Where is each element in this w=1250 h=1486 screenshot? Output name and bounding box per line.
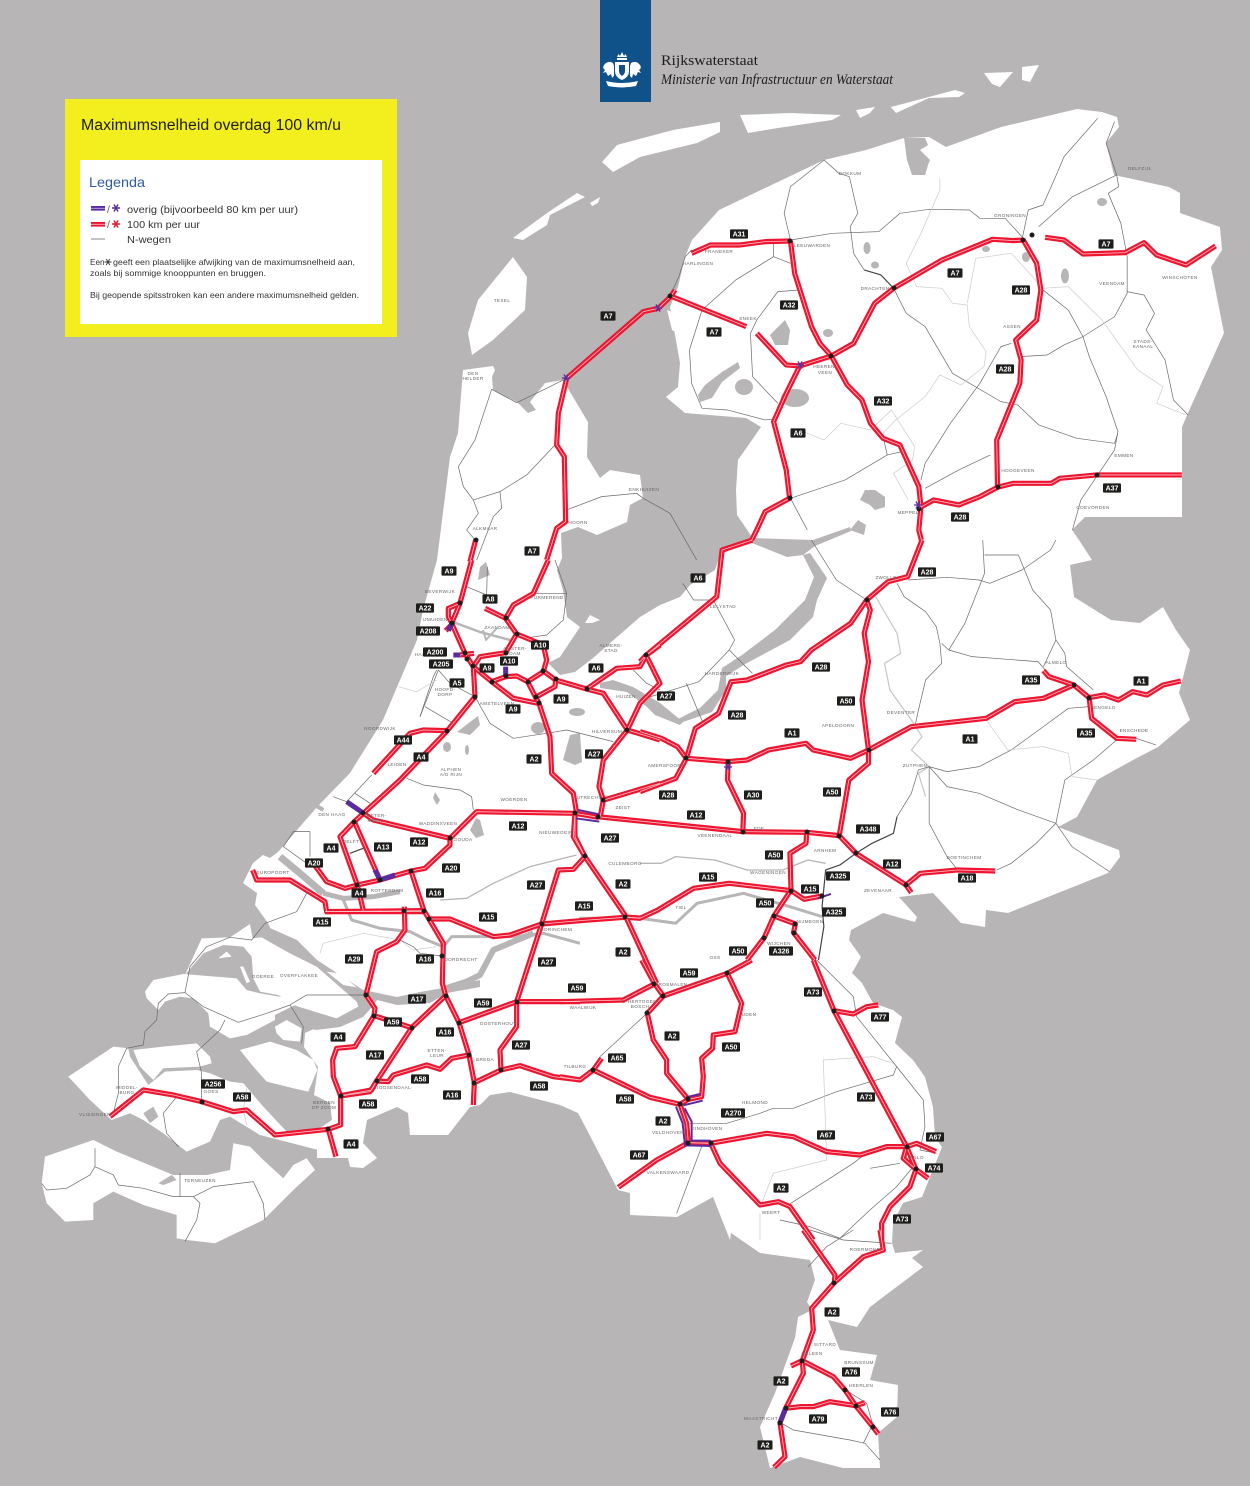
place names: LEEUWARDEN: [794, 243, 830, 248]
place names: NIJMEGEN: [796, 919, 824, 924]
place names: VALKENSWAARD: [647, 1170, 690, 1175]
place names: OVERFLAKKEE: [280, 973, 318, 978]
Veluwemeer: [676, 553, 827, 722]
place names: WOERDEN: [501, 797, 527, 802]
legend: red road swatch: 100 km per uur: [127, 219, 201, 231]
motorway number badges: A20: [445, 866, 458, 872]
motorway number badges: A27: [588, 752, 601, 758]
place names: DORP: [438, 692, 452, 697]
motorway number badges: A32: [877, 398, 890, 406]
place names: ALMELO: [1045, 660, 1067, 665]
place names: HENGELO: [1090, 705, 1116, 710]
Rijkswaterstaat logo: [600, 0, 894, 102]
motorway number badges: A15: [702, 874, 715, 882]
place names: BURG: [120, 1090, 134, 1095]
purple outline around Eindhoven ring: [676, 1094, 712, 1146]
yellow panel: [65, 99, 397, 337]
place names: ROOSENDAAL: [375, 1085, 411, 1090]
place names: HOOGEVEEN: [1001, 468, 1035, 473]
motorway number badges: A28: [1015, 288, 1028, 294]
logo shield detail: [619, 65, 625, 76]
motorway number badges: A27: [530, 882, 543, 890]
motorway number badges: A4: [327, 846, 336, 852]
motorway number badges: A37: [1106, 486, 1119, 492]
motorway number badges: A44: [397, 738, 410, 744]
motorway number badges: A2: [619, 950, 628, 956]
motorway number badges: A4: [347, 1142, 356, 1148]
place names: LEUR: [430, 1053, 444, 1058]
speed-deviation asterisks: [562, 304, 922, 770]
legend: purple road swatch: /: [107, 204, 110, 216]
ministry name: Ministerie van Infrastructuur en Waterstaat: [660, 72, 894, 88]
place names: AMSTELVEEN: [480, 701, 514, 706]
motorway number badges: A74: [928, 1166, 941, 1172]
motorway number badges: A2: [828, 1310, 837, 1316]
motorway number badges: A8: [486, 596, 495, 604]
motorway number badges: A15: [482, 914, 495, 922]
motorway number badges: A67: [820, 1132, 833, 1140]
motorway number badges: A15: [804, 886, 817, 894]
motorway number badges: A1: [788, 730, 797, 738]
place names: EMMEN: [1114, 453, 1134, 458]
motorway number badges: A58: [236, 1094, 249, 1102]
place names: STADS-: [1134, 339, 1153, 344]
place names: ARNHEM: [814, 848, 836, 853]
motorway number badges: A59: [477, 1000, 490, 1008]
place names: ROTTERDAM: [371, 888, 403, 893]
place names: DORDRECHT: [444, 957, 478, 962]
motorway number badges: A7: [951, 270, 960, 278]
motorway number badges: A16: [429, 890, 442, 898]
motorway number badges: A7: [528, 548, 537, 556]
place names: GORINCHEM: [540, 927, 572, 932]
place names: HELMOND: [742, 1100, 768, 1105]
place names: MEER: [368, 818, 383, 823]
logo blue ribbon: [600, 0, 651, 102]
place names: HEERLEN: [849, 1383, 873, 1388]
motorway number badges: A9: [509, 706, 518, 714]
place names: BEVERWIJK: [425, 589, 456, 594]
motorway number badges: A205: [433, 662, 449, 668]
motorway number badges: A348: [860, 826, 876, 834]
title: Maximumsnelheid overdag 100 km/u: [81, 117, 341, 134]
motorway number badges: A76: [884, 1410, 897, 1416]
organisation name: Rijkswaterstaat: [661, 53, 758, 69]
motorway number badges: A50: [759, 900, 772, 908]
Ketelmeer: [752, 527, 851, 557]
legend note: Een: [90, 258, 105, 267]
place names: EUROPOORT: [256, 870, 290, 875]
motorway number badges: A28: [999, 366, 1012, 374]
motorway number badges: A67: [633, 1152, 646, 1160]
place names: ZEIST: [615, 805, 631, 810]
place names: OP ZOOM: [312, 1105, 336, 1110]
motorway number badges: A77: [874, 1014, 887, 1022]
place names: VELDHOVEN: [652, 1130, 684, 1135]
place names: ALKMAAR: [473, 526, 498, 531]
motorway number badges: A27: [541, 960, 554, 966]
place names: LEIDEN: [387, 762, 407, 767]
place names: TERNEUZEN: [184, 1178, 216, 1183]
place names: DRACHTEN: [861, 286, 889, 291]
place names: BOSCH: [631, 1004, 649, 1009]
motorway number badges: A2: [619, 882, 628, 888]
motorway number badges: A7: [710, 330, 719, 336]
motorway number badges: A73: [807, 990, 820, 996]
place names: ROERMOND: [850, 1247, 881, 1252]
place names: DOETINCHEM: [946, 855, 982, 860]
place names: MIDDEL-: [116, 1085, 138, 1090]
place names: HOOFD-: [435, 687, 455, 692]
purple speed-deviation segments: [347, 624, 831, 1423]
place names: KANAAL: [1133, 344, 1153, 349]
place names: NOORDWIJK: [364, 726, 396, 731]
place names: ZOETER-: [363, 813, 387, 818]
place names: AMERSFOORT: [648, 763, 684, 768]
place names: DOKKUM: [839, 171, 861, 176]
place names: VEENDAM: [1099, 281, 1125, 286]
motorway number badges: A13: [377, 844, 390, 852]
place names: WINSCHOTEN: [1162, 275, 1198, 280]
place names: HELDER: [462, 376, 484, 381]
motorway number badges: A7: [1102, 242, 1111, 248]
legend heading: Legenda: [89, 174, 145, 190]
place names: VEEN: [818, 370, 832, 375]
motorway number badges: A6: [694, 576, 703, 582]
place names: MAASTRICHT: [744, 1416, 778, 1421]
Haringvliet and Hollandsch Diep: [263, 925, 480, 1030]
place names: ALPHEN: [441, 767, 461, 772]
motorway number badges: A325: [830, 874, 846, 880]
place names: GOEREE: [252, 974, 274, 979]
legend note: [90, 258, 359, 300]
place names: FRANEKER: [705, 249, 733, 254]
motorway number badges: A65: [611, 1056, 624, 1062]
place names: ALMERE-: [599, 643, 623, 648]
place names: HARDERWIJK: [705, 671, 740, 676]
road centre lines: [110, 237, 1216, 1467]
motorway number badges: A256: [205, 1082, 221, 1088]
motorway number badges: A73: [896, 1216, 909, 1224]
place names: VEENENDAAL: [697, 833, 733, 838]
motorway number badges: A17: [369, 1052, 382, 1060]
place names: WADDINXVEEN: [419, 821, 457, 826]
motorway number badges: A59: [387, 1020, 400, 1026]
motorway number badges: A12: [512, 824, 525, 830]
place names: VLISSINGEN: [79, 1112, 111, 1117]
motorway number badges: A35: [1025, 678, 1038, 684]
place names: COEVORDEN: [1076, 505, 1110, 510]
place names: ETTEN-: [427, 1048, 447, 1053]
motorway number badges: A18: [961, 876, 974, 882]
motorway number badges: A31: [733, 232, 746, 238]
place names: VENLO: [906, 1155, 924, 1160]
place names: GELEEN: [801, 1351, 823, 1356]
place names: HARLINGEN: [683, 261, 713, 266]
motorway number badges: A2: [777, 1378, 786, 1386]
place names: DAM: [509, 651, 521, 656]
motorway number badges: A22: [419, 606, 432, 612]
motorway number badges: A1: [966, 736, 975, 744]
place names: A/D RIJN: [440, 772, 462, 777]
lakes and inland water: [263, 138, 1107, 1030]
motorway number badges: A10: [503, 658, 516, 666]
legend box: [80, 160, 382, 324]
icon: royal coat of arms: [603, 52, 641, 88]
motorway number badges: A27: [660, 694, 673, 700]
motorway number badges: A28: [921, 570, 934, 576]
motorway number badges: A2: [668, 1034, 677, 1040]
motorway number badges: A67: [929, 1134, 942, 1142]
place names: DELFT: [343, 839, 359, 844]
motorway number badges: A9: [445, 568, 454, 576]
place names: HEEREN-: [813, 364, 837, 369]
motorway number badges: A50: [732, 948, 745, 956]
legend: purple road swatch: overig (bijvoorbeeld 80 km per uur): [127, 204, 298, 216]
place names: OOSTERHOUT: [480, 1021, 516, 1026]
place names: LELYSTAD: [710, 604, 736, 609]
motorway number badges: A2: [659, 1118, 668, 1126]
place names: ASSEN: [1003, 324, 1021, 329]
motorway number badges: A9: [557, 696, 566, 704]
place names: ZUTPHEN: [903, 763, 927, 768]
place names: OSS: [710, 955, 720, 960]
place names: ZEVENAAR: [864, 888, 892, 893]
place names: PURMEREND: [530, 595, 564, 600]
place names: ENSCHEDE: [1120, 728, 1148, 733]
motorway number badges: A12: [413, 840, 426, 846]
place names: CULEMBORG: [608, 861, 642, 866]
junction nodes: [200, 232, 1100, 1430]
place names: DELFZIJL: [1128, 166, 1152, 171]
Wadden islands: [468, 65, 1039, 623]
motorway number badges: A73: [860, 1094, 873, 1102]
place names: GOUDA: [454, 837, 473, 842]
place names: BERGEN: [313, 1100, 335, 1105]
motorway number badges: A10: [534, 642, 547, 650]
motorway number badges: A200: [427, 650, 443, 656]
place names: HILVERSUM: [592, 729, 622, 734]
place names: WAALWIJK: [570, 1005, 597, 1010]
legend note: zoals bij sommige knooppunten en bruggen.: [90, 269, 266, 278]
place names: TEXEL: [494, 298, 510, 303]
motorway number badges: A9: [483, 666, 492, 672]
legend note: Bij geopende spitsstroken kan een andere maximumsnelheid gelden.: [90, 291, 359, 300]
place names: TILBURG: [564, 1064, 586, 1069]
place names: TIEL: [675, 905, 687, 910]
place names: EDE: [754, 826, 764, 831]
motorway number badges: A17: [411, 996, 424, 1004]
place names: [79, 166, 1198, 1421]
motorway network, 100 km/h: [110, 237, 1216, 1467]
place names: UTRECHT: [577, 795, 601, 800]
motorway number badges: A58: [414, 1076, 427, 1084]
motorway number badges: A79: [812, 1416, 825, 1424]
Zeeland and South Holland islands: [42, 924, 358, 1243]
motorway number badges: A58: [619, 1096, 632, 1104]
motorway number badges: A270: [725, 1110, 741, 1118]
motorway number badges: A5: [453, 680, 462, 688]
place names: GRONINGEN: [994, 213, 1026, 218]
rivers: [280, 597, 929, 988]
place names: DEVENTER: [887, 710, 915, 715]
legend: N-roads swatch: N-wegen: [127, 234, 171, 246]
place names: AMSTER-: [503, 646, 527, 651]
motorway number badges: A12: [886, 862, 899, 868]
place names: EINDHOVEN: [691, 1126, 723, 1131]
motorway number badges: A28: [662, 792, 675, 800]
motorway number badges: A16: [446, 1092, 459, 1100]
legend: red road swatch: [91, 219, 201, 231]
motorway number badges: A59: [683, 970, 696, 978]
motorway number badges: A4: [355, 890, 364, 898]
place names: BREDA: [476, 1057, 494, 1062]
motorway number badges: A20: [308, 860, 321, 868]
place names: APELDOORN: [822, 723, 854, 728]
motorway number badges: A12: [690, 812, 703, 820]
motorway number badges: A2: [761, 1442, 770, 1450]
motorway number badges: A15: [578, 904, 591, 910]
motorway number badges: A35: [1080, 730, 1093, 738]
motorway number badges: A6: [592, 666, 601, 672]
place names: NIEUWEGEIN: [539, 830, 573, 835]
motorway number badges: A58: [362, 1102, 375, 1108]
place names: GOES: [204, 1089, 218, 1094]
motorway number badges: A6: [794, 430, 803, 438]
mainland silhouette: [243, 109, 1224, 1468]
motorway number badges: A325: [826, 910, 842, 916]
place names: ENKHUIZEN: [629, 487, 659, 492]
motorway number badges: A50: [725, 1044, 738, 1052]
motorway number badges: A28: [815, 664, 828, 672]
motorway number badges: A50: [768, 852, 781, 860]
motorway number badges: [201, 229, 1148, 1450]
motorway number badges: A29: [348, 956, 361, 964]
place names: ZAANDAM: [484, 625, 510, 630]
place names: ROSMALEN: [658, 982, 688, 987]
place names: WAGENINGEN: [750, 870, 786, 875]
motorway number badges: A1: [1137, 678, 1146, 686]
motorway number badges: A76: [845, 1370, 858, 1376]
motorway number badges: A28: [954, 514, 967, 522]
motorway number badges: A16: [439, 1030, 452, 1036]
place names: 'S-HERTOGEN-: [621, 999, 659, 1004]
place names: WIJCHEN: [767, 941, 791, 946]
panel: title and legend: [65, 99, 397, 337]
place names: IJMUIDEN: [423, 617, 447, 622]
motorway number badges: A208: [420, 628, 436, 636]
motorway number badges: A50: [840, 698, 853, 706]
place names: DEN: [468, 371, 478, 376]
motorway number badges: A7: [604, 314, 613, 320]
place names: MEPPEL: [897, 510, 919, 515]
motorway number badges: A32: [783, 302, 796, 310]
legend: red road swatch: /: [107, 219, 110, 231]
place names: ZWOLLE: [875, 575, 897, 580]
place names: DEN HAAG: [318, 812, 346, 817]
place names: BRUNSSUM: [844, 1360, 874, 1365]
motorway number badges: A326: [773, 948, 789, 956]
motorway number badges: A15: [316, 920, 329, 926]
legend note: geeft een plaatselijke afwijking van de maximumsnelheid aan,: [113, 258, 355, 267]
Gooimeer: [600, 680, 683, 725]
place names: HOORN: [568, 520, 588, 525]
place names: HUIZEN: [616, 694, 636, 699]
motorway number badges: A2: [530, 756, 539, 764]
motorway number badges: A30: [747, 792, 760, 800]
motorway number badges: A16: [419, 956, 432, 964]
place names: WEERT: [762, 1210, 780, 1215]
place names: HAA: [415, 652, 426, 657]
motorway number badges: A58: [533, 1084, 546, 1090]
legend: N-roads swatch: [91, 234, 171, 246]
motorway number badges: A59: [571, 986, 584, 992]
motorway number badges: A4: [417, 754, 426, 762]
place names: UDEN: [742, 1012, 756, 1017]
place names: STAD: [604, 648, 618, 653]
motorway number badges: A27: [515, 1042, 528, 1050]
place names: SNEEK: [739, 316, 757, 321]
motorway number badges: A2: [777, 1186, 786, 1192]
place names: SITTARD: [814, 1342, 836, 1347]
motorway number badges: A50: [826, 790, 839, 796]
motorway number badges: A28: [731, 712, 744, 720]
motorway number badges: A27: [604, 836, 617, 842]
motorway number badges: A4: [334, 1034, 343, 1042]
